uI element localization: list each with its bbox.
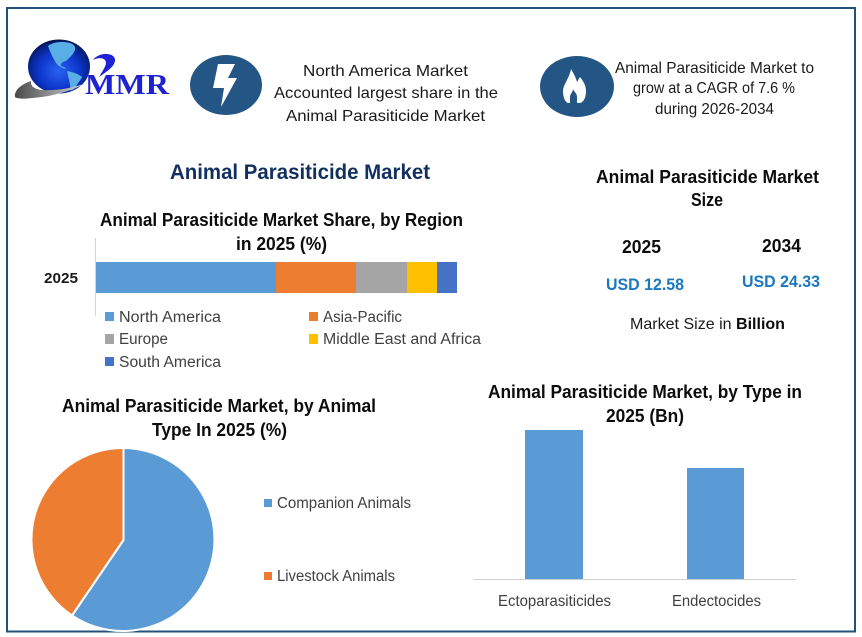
callout: North America: North America Market [303,63,469,80]
value 2025: USD 12.58 [606,275,684,294]
pie title [62,396,376,440]
pie legend: Companion Animals [277,495,411,512]
pie title: Type In 2025 (%) [152,420,287,440]
callout: North America: Accounted largest share in the [274,85,498,102]
stacked bar [96,262,457,293]
market size heading: Size [691,190,723,210]
region chart title [100,210,463,254]
region legend: Asia-Pacific [323,309,402,326]
column label: Ectoparasiticides: Ectoparasiticides [498,593,611,610]
region legend: North America [119,309,221,326]
logo blue two [93,54,115,77]
market size heading: Animal Parasiticide Market [596,167,819,187]
region axis label: 2025 [44,270,78,287]
year 2025: 2025 [622,237,661,257]
callout: CAGR [615,60,814,118]
region chart title: in 2025 (%) [236,234,327,254]
panel: market size [596,167,820,333]
callout: North America: Animal Parasiticide Market [286,108,486,125]
pie legend [264,495,411,585]
main title: Animal Parasiticide Market [170,161,430,184]
icon: lightning bolt [190,55,262,115]
panel: by type [473,382,802,610]
year 2034: 2034 [762,236,801,256]
logo: MMR globe [15,40,170,101]
logo globe [28,40,90,94]
market size heading [596,167,819,210]
icon: flame [540,56,614,117]
region legend: South America [119,354,221,371]
logo swoosh [15,81,86,99]
logo continents [48,42,82,90]
region legend [105,309,481,371]
column label: Endectocides: Endectocides [672,593,761,610]
panel: by animal type [31,396,411,631]
column chart [473,430,796,580]
region legend: Middle East and Africa [323,331,481,348]
pie title: Animal Parasiticide Market, by Animal [62,396,376,416]
callout: CAGR: Animal Parasiticide Market to [615,60,814,77]
market size note: Market Size in Billion [630,316,785,333]
callout: CAGR: during 2026-2034 [655,101,774,118]
pie chart [31,448,214,631]
panel: share by region [44,210,481,371]
callout: North America [274,63,498,125]
region chart title: Animal Parasiticide Market Share, by Region [100,210,463,230]
pie legend: Livestock Animals [277,568,395,585]
type chart title: Animal Parasiticide Market, by Type in [488,382,802,402]
logo wordmark: MMR [85,70,170,101]
region legend: Europe [119,331,168,348]
callout: CAGR: grow at a CAGR of 7.6 % [633,80,795,97]
value 2034: USD 24.33 [742,272,820,291]
type chart title: 2025 (Bn) [606,406,684,426]
type chart title [488,382,802,426]
